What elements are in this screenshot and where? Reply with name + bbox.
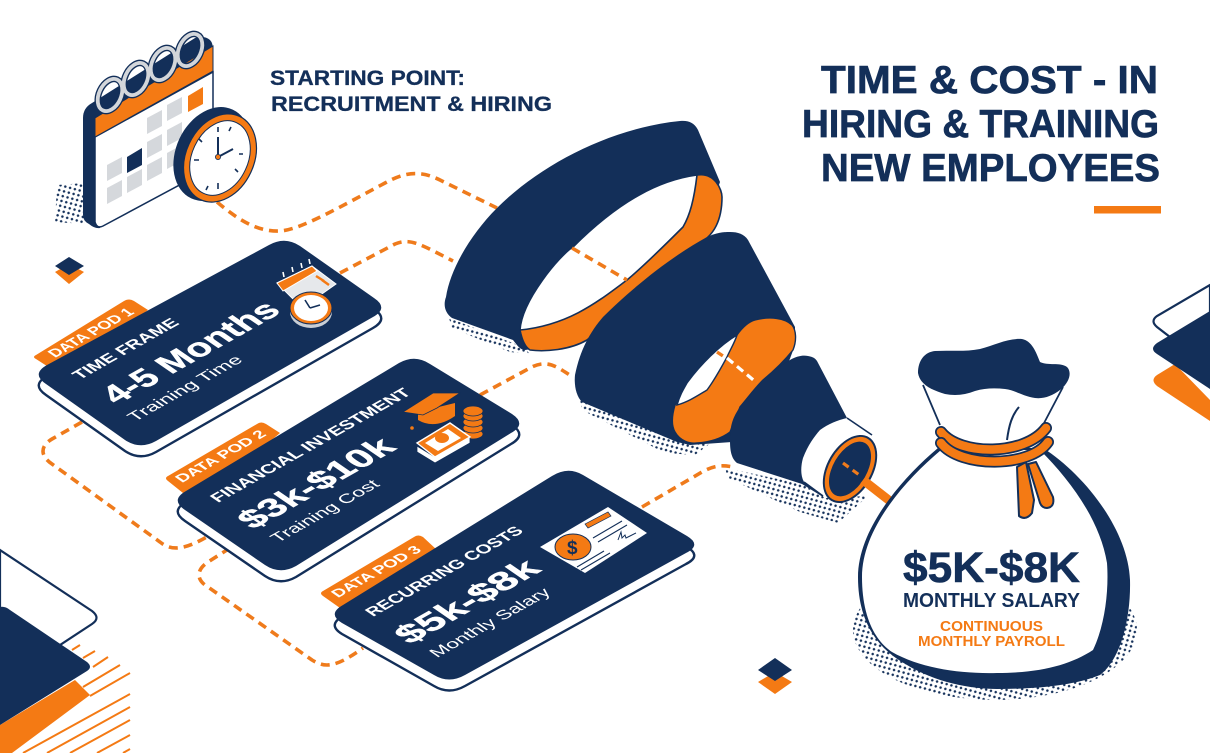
funnel: small spout (730, 356, 895, 513)
dotted shadows under funnel (449, 318, 868, 523)
title: TIME & COST - IN (821, 59, 1158, 102)
title accent bar (1094, 206, 1161, 214)
value: 4-5 months: 4-5 Months (93, 296, 289, 409)
panel: data pod 1 (34, 241, 381, 456)
label: continuous monthly payroll (918, 619, 1065, 650)
heading: financial investment: FINANCIAL INVESTMENT (206, 385, 416, 505)
decoration: bottom-left layered sheets (0, 550, 130, 753)
icon: spout opening (812, 425, 888, 513)
label: monthly salary: MONTHLY SALARY (903, 590, 1081, 612)
value: $5k-$8k: $5k-$8k (386, 554, 549, 649)
caption: monthly salary: Monthly Salary (425, 585, 556, 660)
title (802, 59, 1160, 190)
caption: training time: Training Time (123, 352, 247, 424)
decoration: small stacked diamond bottom (758, 658, 792, 694)
funnel: large top ring (445, 121, 722, 351)
icon: rope tails (1017, 462, 1053, 518)
heading: starting point: RECRUITMENT & HIRING (271, 93, 552, 116)
decoration: small stacked diamond left (55, 257, 84, 284)
icon: money bag (853, 339, 1137, 700)
title: NEW EMPLOYEES (821, 147, 1160, 190)
label: continuous monthly payroll: CONTINUOUS (940, 619, 1043, 635)
icon: rope (941, 428, 1048, 462)
icon: bag top (918, 339, 1070, 398)
heading: starting point: STARTING POINT: (270, 67, 465, 90)
panel: data pod 2 (166, 359, 519, 581)
connector: dashed paths (43, 174, 733, 665)
decoration: right-edge layered sheets (1153, 285, 1210, 421)
label: continuous monthly payroll: MONTHLY PAYROLL (918, 634, 1065, 650)
caption: training cost: Training Cost (266, 477, 384, 545)
label: data pod 1: DATA POD 1 (44, 305, 139, 360)
funnel: middle ring (575, 232, 796, 445)
heading: time frame: TIME FRAME (68, 315, 183, 382)
heading: starting point (270, 67, 552, 116)
panel: data pod 3 (321, 471, 694, 690)
value: bag salary: $5K-$8K (903, 544, 1080, 592)
icon: graduation cap, coins and cash (403, 393, 483, 463)
icon: calendar and clock (277, 259, 336, 328)
label: data pod 2: DATA POD 2 (172, 428, 271, 485)
value: $3k-$10k: $3k-$10k (229, 432, 404, 534)
icon: calendar with clock (55, 30, 270, 228)
icon: paycheck: $ (567, 538, 578, 559)
icon: paycheck (540, 507, 647, 573)
heading: recurring costs: RECURRING COSTS (361, 523, 528, 619)
title: HIRING & TRAINING (802, 103, 1159, 146)
label: data pod 3: DATA POD 3 (328, 544, 426, 600)
